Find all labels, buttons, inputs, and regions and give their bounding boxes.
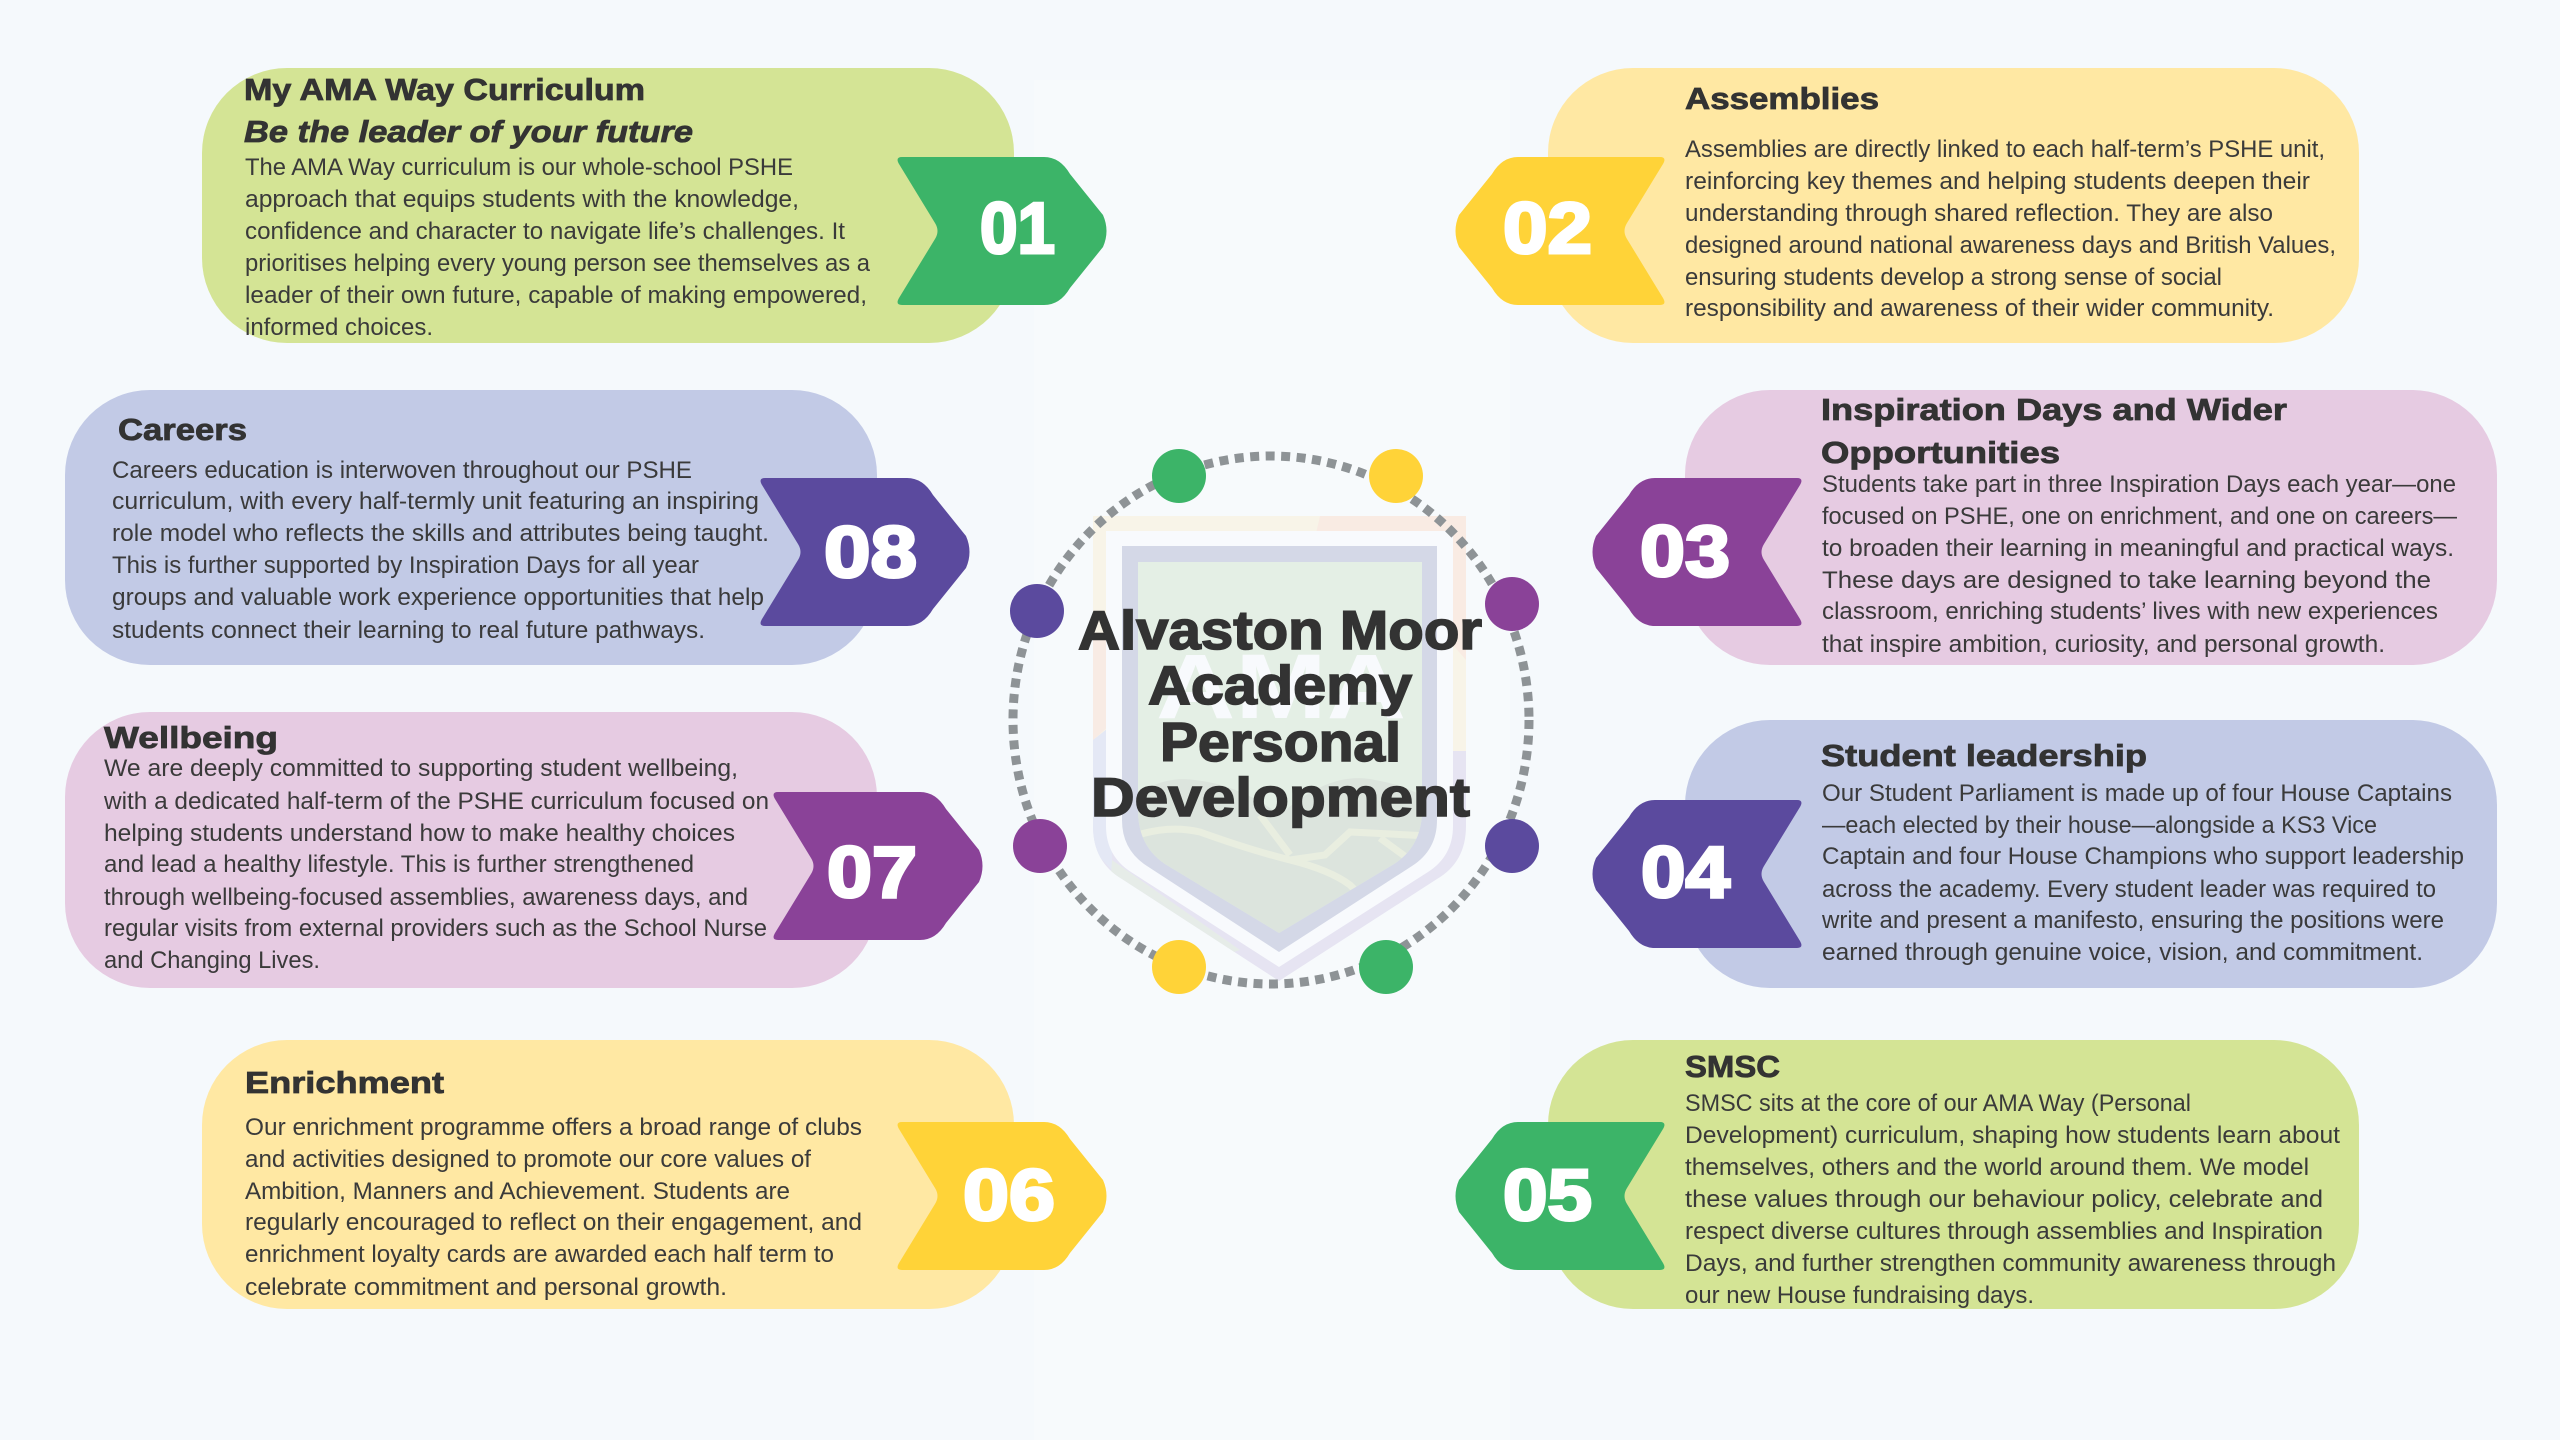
panel: 05 SMSC bbox=[1456, 1040, 2359, 1309]
body text: curriculum, with every half-termly unit featuring an inspiring bbox=[112, 488, 759, 515]
ring nodes bbox=[1010, 449, 1539, 994]
panel background bbox=[1685, 720, 2497, 988]
central shield logo watermark: AMA bbox=[1156, 636, 1406, 738]
panel: 02 Assemblies bbox=[1456, 68, 2359, 343]
body text bbox=[1822, 471, 2457, 658]
body text: We are deeply committed to supporting student wellbeing, bbox=[104, 755, 738, 782]
body text: and Changing Lives. bbox=[104, 947, 320, 974]
body text: celebrate commitment and personal growth. bbox=[245, 1274, 727, 1301]
body text: Careers education is interwoven throughout our PSHE bbox=[112, 457, 692, 484]
chevron: 03 bbox=[1592, 478, 1801, 626]
heading line two: Opportunities bbox=[1821, 435, 2060, 470]
panel background bbox=[1548, 68, 2359, 343]
body text: regularly encouraged to reflect on their engagement, and bbox=[245, 1209, 862, 1236]
body text: approach that equips students with the knowledge, bbox=[245, 186, 799, 213]
body text: confidence and character to navigate life’s challenges. It bbox=[245, 218, 845, 245]
body text: Assemblies are directly linked to each half-term’s PSHE unit, bbox=[1685, 136, 2325, 163]
body text: through wellbeing-focused assemblies, awareness days, and bbox=[104, 884, 748, 911]
heading: SMSC bbox=[1685, 1049, 1780, 1084]
panel: 06 Enrichment bbox=[202, 1040, 1106, 1309]
body text: classroom, enriching students’ lives with new experiences bbox=[1822, 598, 2438, 625]
body text: earned through genuine voice, vision, and commitment. bbox=[1822, 939, 2423, 966]
body text bbox=[1821, 780, 2464, 966]
panel: 03 Inspiration Days and Wider Opportunities bbox=[1592, 390, 2497, 665]
body text: Days, and further strengthen community awareness through bbox=[1685, 1250, 2336, 1277]
chevron: 08: 08 bbox=[824, 513, 917, 593]
heading: My AMA Way Curriculum bbox=[244, 72, 645, 107]
body text bbox=[1685, 136, 2336, 322]
body text: respect diverse cultures through assemblies and Inspiration bbox=[1685, 1218, 2323, 1245]
central title: Academy bbox=[1148, 654, 1412, 716]
body text bbox=[245, 1114, 862, 1301]
body text: role model who reflects the skills and attributes being taught. bbox=[112, 520, 769, 547]
panel background bbox=[1685, 390, 2497, 665]
body text: Our Student Parliament is made up of four House Captains bbox=[1822, 780, 2452, 807]
central title: Development bbox=[1091, 766, 1470, 828]
body text: and activities designed to promote our core values of bbox=[245, 1146, 811, 1173]
body text bbox=[1685, 1090, 2340, 1309]
panel background bbox=[65, 712, 877, 988]
body text: This is further supported by Inspiration Days for all year bbox=[112, 552, 699, 579]
heading: Enrichment bbox=[245, 1065, 444, 1100]
chevron: 01: 01 bbox=[980, 189, 1055, 269]
central title bbox=[1078, 599, 1482, 828]
body text: The AMA Way curriculum is our whole-school PSHE bbox=[245, 154, 793, 181]
panel: 08 Careers bbox=[65, 390, 970, 665]
body text: These days are designed to take learning beyond the bbox=[1822, 567, 2431, 594]
body text: designed around national awareness days and British Values, bbox=[1685, 232, 2336, 259]
body text: with a dedicated half-term of the PSHE curriculum focused on bbox=[103, 788, 769, 815]
chevron: 03: 03 bbox=[1640, 512, 1730, 592]
body text: our new House fundraising days. bbox=[1685, 1282, 2034, 1309]
central title: Alvaston Moor bbox=[1078, 599, 1482, 661]
body text: these values through our behaviour policy, celebrate and bbox=[1685, 1186, 2323, 1213]
body text: ensuring students develop a strong sense of social bbox=[1685, 264, 2222, 291]
body text: write and present a manifesto, ensuring the positions were bbox=[1821, 907, 2444, 934]
dotted ring bbox=[1013, 456, 1529, 984]
heading: Careers bbox=[118, 412, 247, 447]
body text: themselves, others and the world around them. We model bbox=[1685, 1154, 2309, 1181]
chevron: 02 bbox=[1456, 157, 1664, 305]
chevron: 05: 05 bbox=[1503, 1156, 1592, 1236]
chevron: 04: 04 bbox=[1641, 833, 1730, 913]
heading: Assemblies bbox=[1685, 81, 1879, 116]
panel background bbox=[65, 390, 877, 665]
panel background bbox=[202, 1040, 1014, 1309]
body text: leader of their own future, capable of making empowered, bbox=[245, 282, 867, 309]
panel: 07 Wellbeing bbox=[65, 712, 982, 988]
body text bbox=[245, 154, 871, 341]
body text: Students take part in three Inspiration Days each year—one bbox=[1822, 471, 2456, 498]
heading: Student leadership bbox=[1821, 738, 2147, 773]
body text: enrichment loyalty cards are awarded each half term to bbox=[245, 1241, 834, 1268]
body text: reinforcing key themes and helping students deepen their bbox=[1685, 168, 2310, 195]
body text: Ambition, Manners and Achievement. Students are bbox=[245, 1178, 790, 1205]
body text: across the academy. Every student leader was required to bbox=[1822, 876, 2436, 903]
body text: to broaden their learning in meaningful and practical ways. bbox=[1822, 535, 2454, 562]
panel: 04 Student leadership bbox=[1592, 720, 2497, 988]
panel background bbox=[1548, 1040, 2359, 1309]
body text: Our enrichment programme offers a broad range of clubs bbox=[245, 1114, 862, 1141]
body text: Development) curriculum, shaping how students learn about bbox=[1685, 1122, 2340, 1149]
body text: groups and valuable work experience opportunities that help bbox=[112, 584, 764, 611]
panel: 01 My AMA Way Curriculum bbox=[202, 68, 1106, 343]
body text bbox=[103, 755, 769, 974]
body text: prioritises helping every young person see themselves as a bbox=[245, 250, 871, 277]
body text: focused on PSHE, one on enrichment, and one on careers— bbox=[1822, 503, 2457, 530]
chevron: 07: 07 bbox=[827, 833, 917, 913]
body text: understanding through shared reflection. They are also bbox=[1685, 200, 2273, 227]
body text: helping students understand how to make healthy choices bbox=[104, 820, 735, 847]
heading: Inspiration Days and Wider bbox=[1821, 392, 2287, 427]
chevron: 06 bbox=[898, 1122, 1106, 1270]
chevron: 08 bbox=[761, 478, 970, 626]
chevron: 06: 06 bbox=[963, 1156, 1055, 1236]
body text: informed choices. bbox=[245, 314, 433, 341]
body text bbox=[112, 457, 769, 644]
chevron: 07 bbox=[774, 792, 982, 940]
body text: —each elected by their house—alongside a KS3 Vice bbox=[1822, 812, 2377, 839]
central title: Personal bbox=[1160, 711, 1401, 773]
body text: and lead a healthy lifestyle. This is further strengthened bbox=[104, 851, 694, 878]
chevron: 05 bbox=[1456, 1122, 1664, 1270]
body text: that inspire ambition, curiosity, and personal growth. bbox=[1822, 631, 2385, 658]
panel background bbox=[202, 68, 1014, 343]
chevron: 01 bbox=[898, 157, 1106, 305]
body text: students connect their learning to real future pathways. bbox=[112, 617, 705, 644]
heading: Wellbeing bbox=[104, 720, 278, 755]
chevron: 04 bbox=[1592, 800, 1801, 948]
chevron: 02: 02 bbox=[1503, 189, 1592, 269]
central shield logo watermark bbox=[1093, 516, 1466, 981]
body text: SMSC sits at the core of our AMA Way (Personal bbox=[1685, 1090, 2191, 1117]
body text: regular visits from external providers such as the School Nurse bbox=[104, 915, 767, 942]
body text: responsibility and awareness of their wider community. bbox=[1685, 295, 2274, 322]
subheading: Be the leader of your future bbox=[244, 114, 693, 149]
body text: Captain and four House Champions who support leadership bbox=[1822, 843, 2464, 870]
